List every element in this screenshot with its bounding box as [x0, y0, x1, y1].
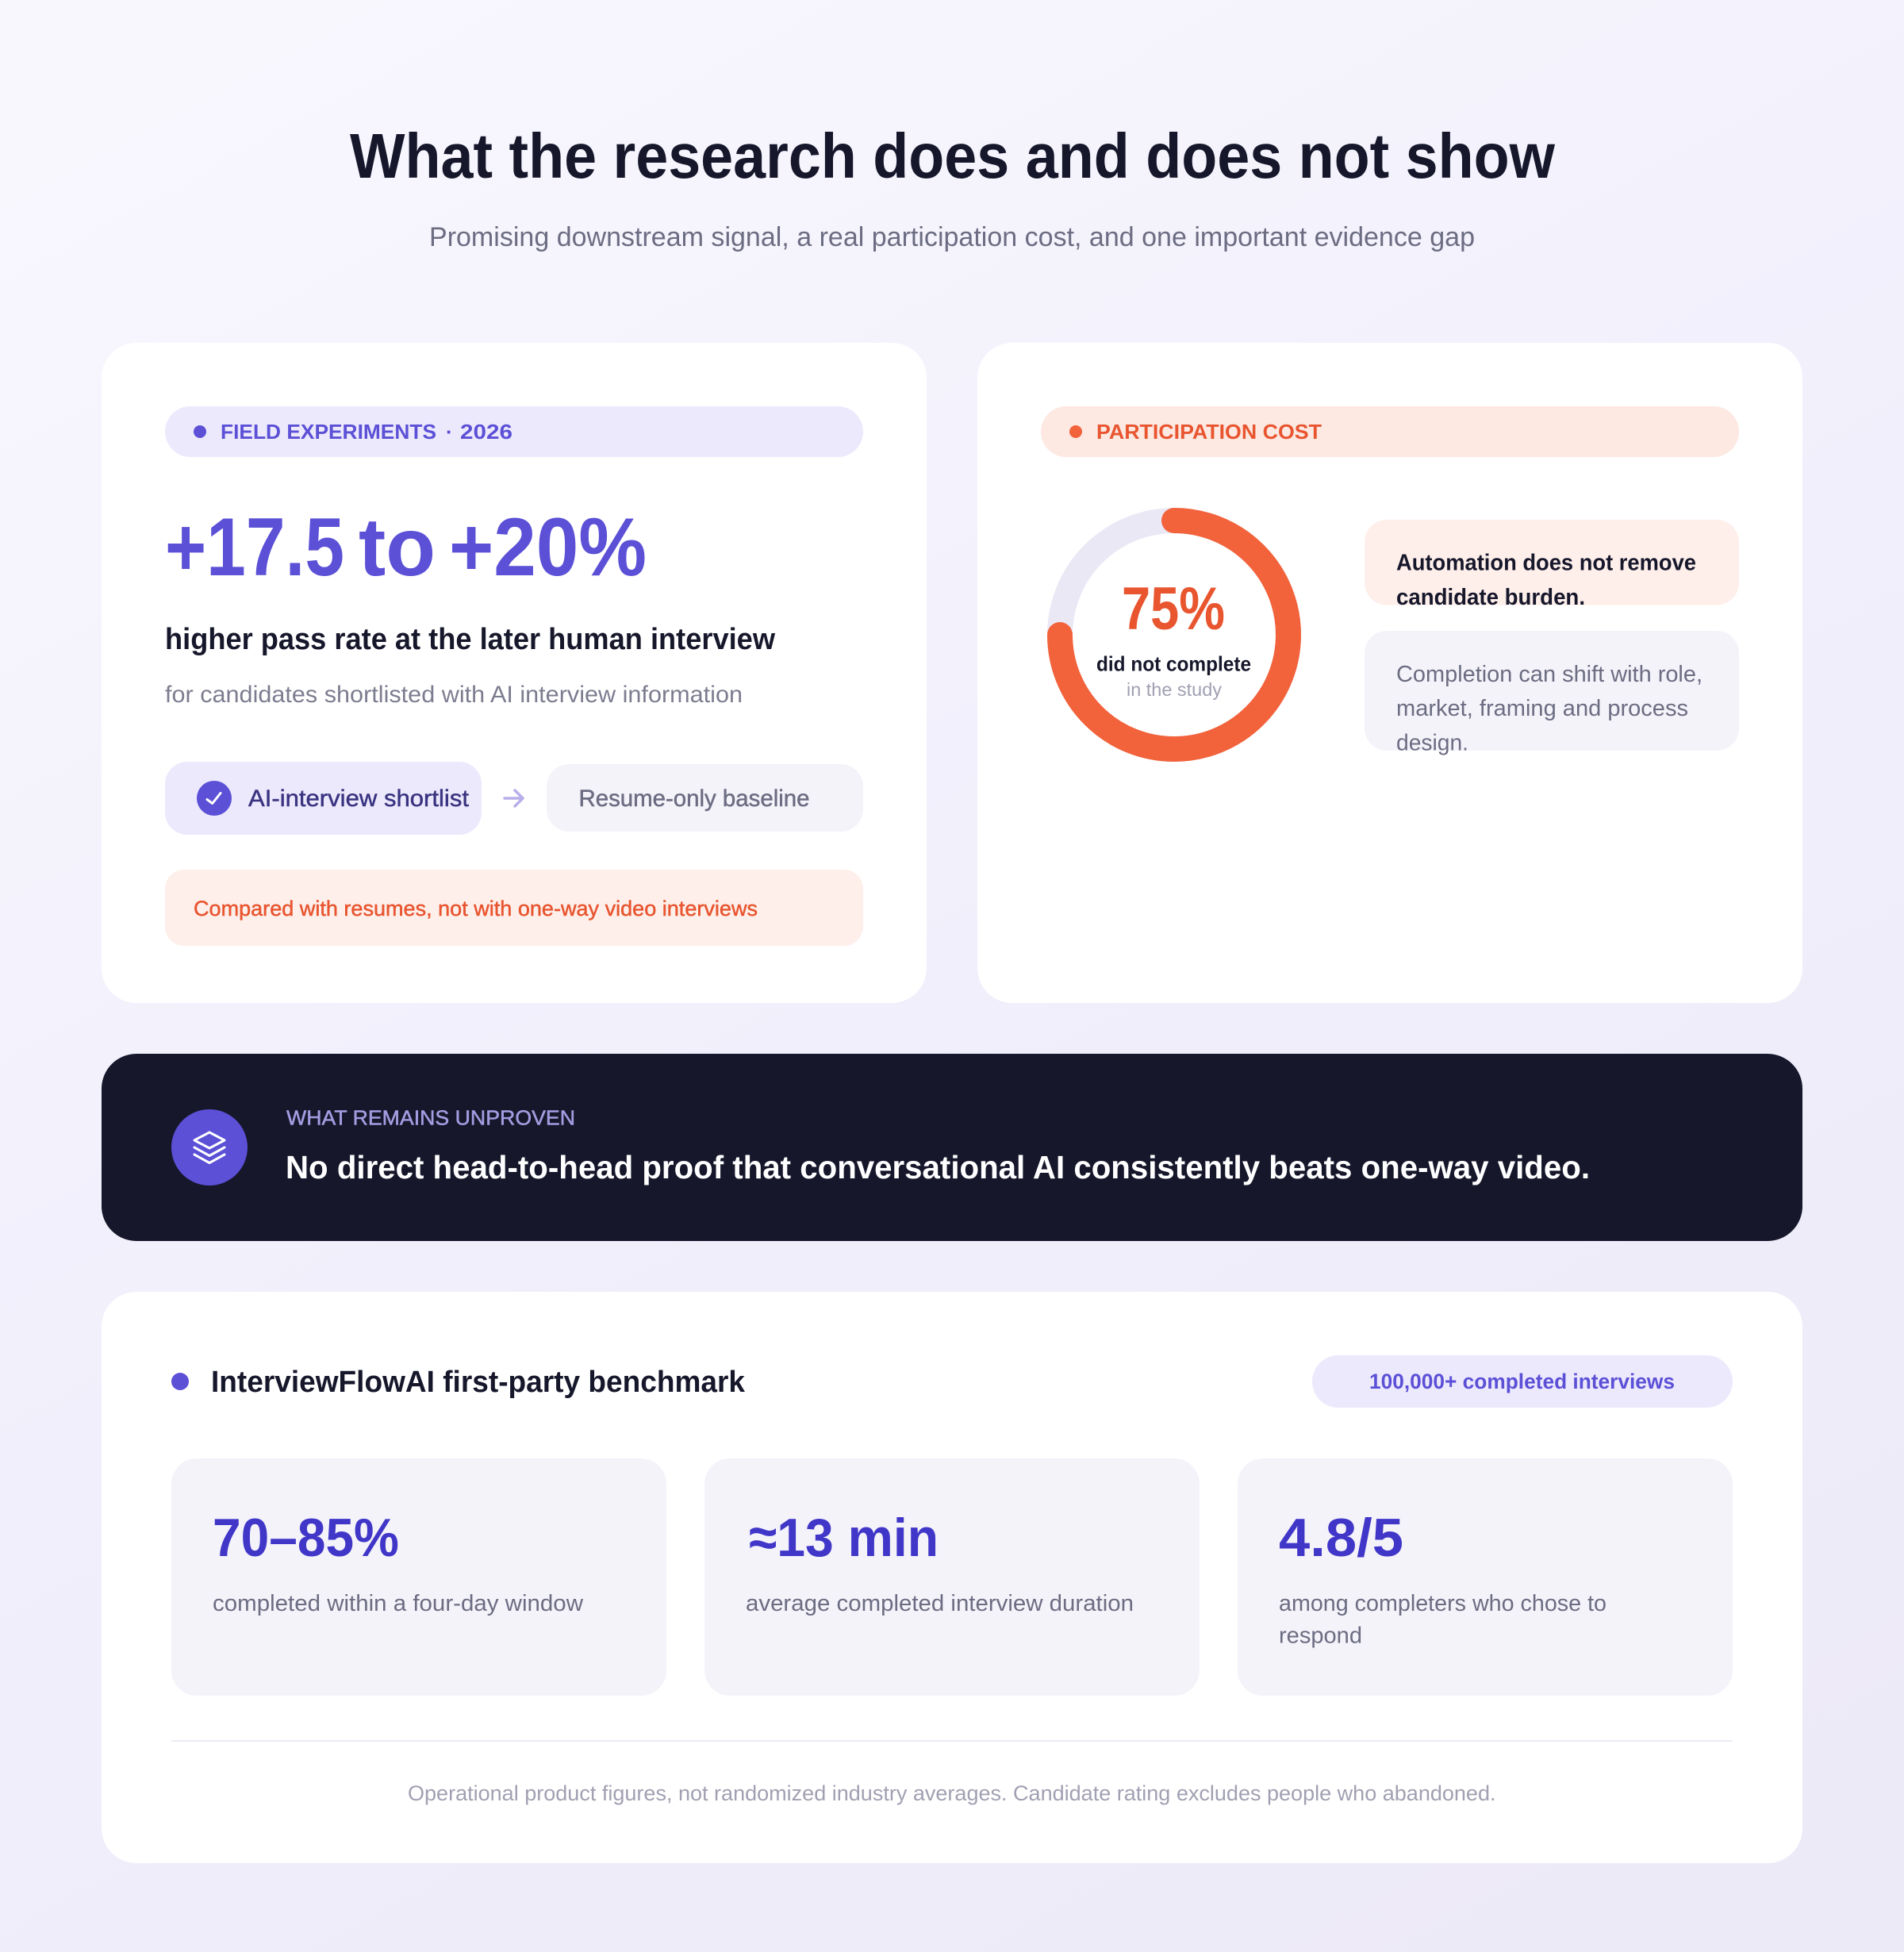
callout: comparison caveat	[165, 870, 863, 946]
chip: AI-interview shortlist	[165, 762, 482, 835]
stat card: rating: among completers who chose to	[1279, 1591, 1606, 1616]
stat card: rating: respond	[1279, 1623, 1362, 1649]
tag: participation cost	[1041, 406, 1739, 457]
note: completion can shift	[1365, 631, 1739, 755]
tag: field experiments 2026	[165, 406, 863, 457]
note: completion can shift: design.	[1396, 730, 1468, 755]
tag: field experiments 2026: ·	[446, 420, 453, 444]
stat card: completion	[171, 1458, 666, 1696]
title: What the research does and does not show	[350, 121, 1556, 191]
chip: AI-interview shortlist: AI-interview shortlist	[248, 786, 470, 812]
arrow	[505, 790, 523, 806]
icon: layers	[171, 1109, 248, 1185]
banner statement: No direct head-to-head proof that conversational AI consistently beats one-way video.	[286, 1149, 1590, 1185]
donut chart: 75% did not complete: in the study	[1127, 679, 1222, 700]
benchmark heading: InterviewFlowAI first-party benchmark	[211, 1366, 746, 1399]
stat qualifier: for candidates shortlisted with AI interview information	[165, 682, 743, 708]
note: automation burden: candidate burden.	[1396, 585, 1585, 610]
donut chart: 75% did not complete	[1060, 521, 1288, 749]
chip: resume-only baseline: Resume-only baseline	[579, 786, 809, 812]
stat card: rating	[1238, 1458, 1733, 1696]
subtitle: Promising downstream signal, a real participation cost, and one important evidence gap	[429, 222, 1475, 252]
callout: comparison caveat: Compared with resumes, not with one-way video interviews	[194, 897, 758, 920]
tag: sample size: 100,000+ completed interviews	[1369, 1370, 1675, 1393]
note: completion can shift: market, framing and process	[1396, 696, 1688, 721]
chip: resume-only baseline	[547, 764, 863, 832]
stat description: higher pass rate at the later human interview	[165, 623, 775, 656]
stat card: duration: average completed interview duration	[746, 1591, 1134, 1616]
big stat: +17.5	[165, 501, 344, 594]
stat card: completion: 70–85%	[213, 1508, 399, 1568]
stat card: duration	[704, 1458, 1200, 1696]
banner label: WHAT REMAINS UNPROVEN	[286, 1106, 575, 1130]
note: completion can shift: Completion can shift with role,	[1396, 662, 1702, 687]
tag: participation cost: PARTICIPATION COST	[1096, 420, 1322, 444]
stat card: completion: completed within a four-day window	[213, 1591, 584, 1616]
big stat: to	[359, 501, 436, 594]
stat card: duration: ≈13 min	[749, 1508, 939, 1568]
banner: what remains unproven	[102, 1054, 1802, 1241]
panel: field experiments	[102, 343, 927, 1003]
footnote: Operational product figures, not randomized industry averages. Candidate rating excludes people who abandoned.	[408, 1781, 1496, 1805]
panel: first-party benchmark	[102, 1292, 1802, 1863]
panel: participation cost	[977, 343, 1802, 1003]
donut chart: 75% did not complete: did not complete	[1096, 652, 1251, 676]
big stat	[165, 501, 647, 594]
tag: field experiments 2026: 2026	[460, 420, 512, 444]
stat card: rating: 4.8/5	[1279, 1508, 1403, 1568]
donut chart: 75% did not complete: 75%	[1122, 575, 1225, 643]
note: automation burden	[1365, 520, 1739, 610]
tag: field experiments 2026: FIELD EXPERIMENTS	[221, 420, 436, 444]
tag: sample size	[1312, 1355, 1733, 1408]
note: automation burden: Automation does not remove	[1396, 551, 1696, 576]
big stat: +20%	[449, 501, 647, 594]
